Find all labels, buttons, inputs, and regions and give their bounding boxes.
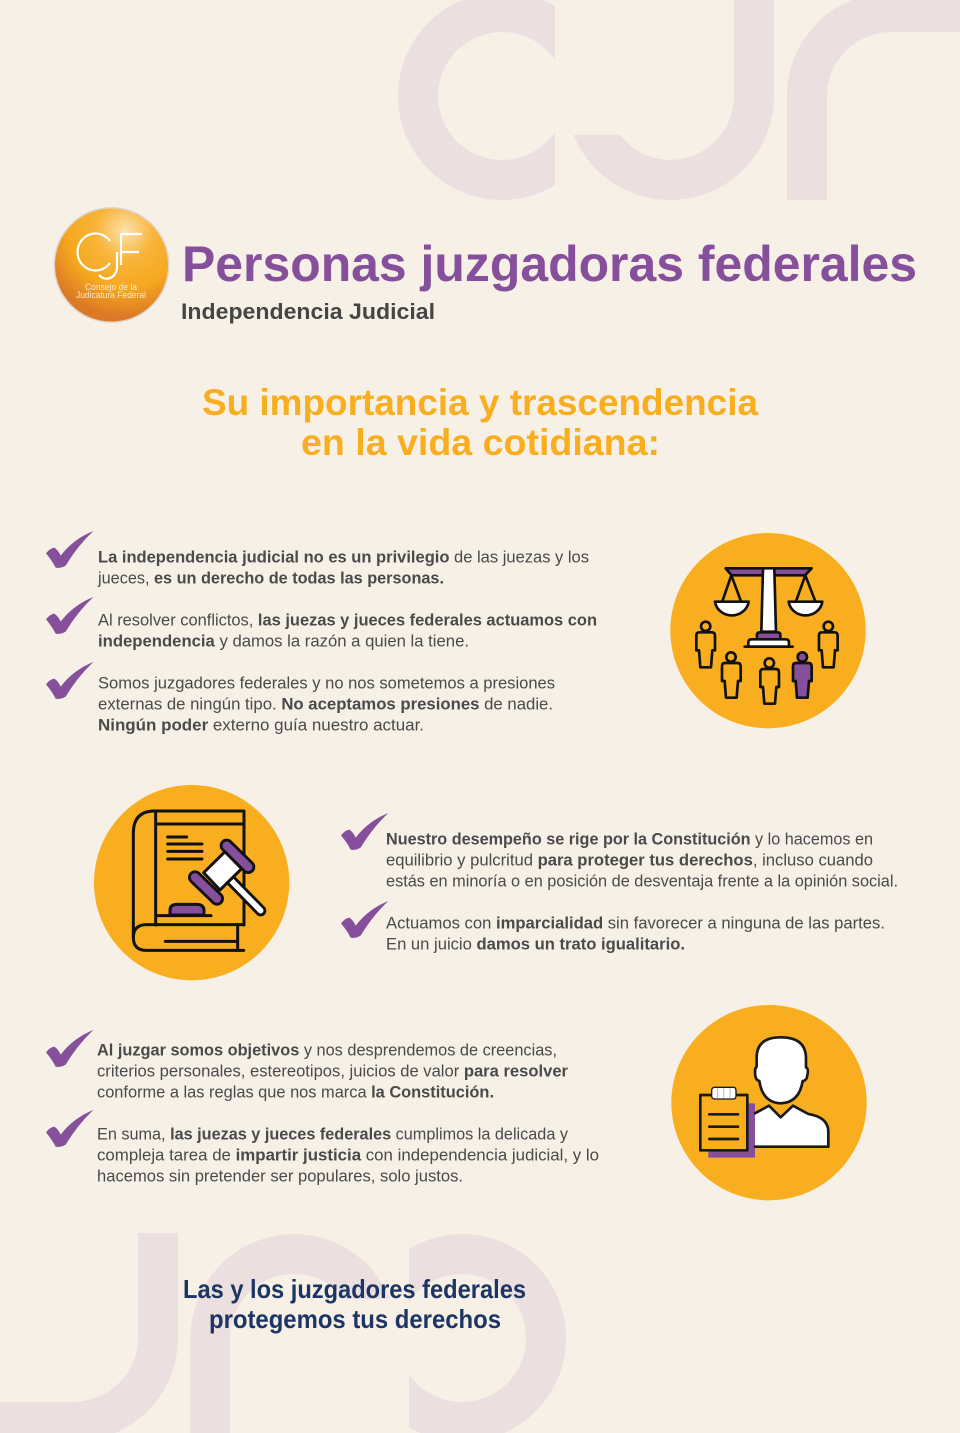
icon: scales and people — [670, 533, 866, 728]
text: Constitución: Nuestro desempeño se rige por la Constitución y lo hacemos en — [386, 830, 873, 848]
checkmark 2 — [46, 597, 93, 634]
checkmark 1 — [46, 531, 93, 568]
closing message — [183, 1274, 526, 1334]
logo: Consejo de la — [85, 282, 137, 292]
text: conflictos: Al resolver conflictos, las juezas y jueces federales actuamos con — [98, 610, 597, 630]
text: objetivos: criterios personales, estereotipos, juicios de valor para resolver — [97, 1062, 568, 1080]
text: privilegio: jueces, es un derecho de todas las personas. — [97, 568, 444, 588]
text: en suma: compleja tarea de impartir justicia con independencia judicial, y lo — [97, 1146, 599, 1164]
icon: person with clipboard — [671, 1005, 867, 1200]
section heading: en la vida cotidiana: — [301, 422, 660, 463]
text: presiones: Somos juzgadores federales y no nos sometemos a presiones — [98, 674, 555, 692]
text: presiones: externas de ningún tipo. No aceptamos presiones de nadie. — [98, 694, 553, 714]
logo: Judicatura Federal — [76, 290, 146, 300]
logo — [54, 207, 170, 323]
text: en suma — [97, 1124, 599, 1186]
text: conflictos: independencia y damos la razón a quien la tiene. — [98, 632, 469, 650]
text: objetivos: conforme a las reglas que nos marca la Constitución. — [97, 1082, 494, 1102]
text: privilegio: La independencia judicial no es un privilegio de las juezas y los — [98, 548, 589, 566]
closing message: protegemos tus derechos — [209, 1304, 501, 1334]
background letters bottom — [0, 1233, 566, 1433]
checkmark 7 — [46, 1110, 93, 1147]
text: objetivos: Al juzgar somos objetivos y nos desprendemos de creencias, — [97, 1040, 557, 1060]
checkmark 3 — [46, 662, 93, 699]
text: objetivos — [97, 1040, 568, 1102]
text: Constitución — [386, 830, 898, 890]
text: presiones — [98, 674, 555, 734]
text: en suma: En suma, las juezas y jueces federales cumplimos la delicada y — [97, 1124, 569, 1144]
text: en suma: hacemos sin pretender ser populares, solo justos. — [97, 1166, 463, 1186]
text: Constitución: estás en minoría o en posición de desventaja frente a la opinión social. — [386, 872, 898, 890]
section heading — [202, 382, 758, 463]
checkmark 4 — [341, 813, 388, 850]
text: imparcialidad: En un juicio damos un trato igualitario. — [386, 934, 685, 954]
closing message: Las y los juzgadores federales — [183, 1274, 526, 1304]
checkmark 5 — [341, 901, 388, 938]
text: presiones: Ningún poder externo guía nuestro actuar. — [98, 716, 424, 734]
checkmark 6 — [46, 1030, 93, 1067]
text: Constitución: equilibrio y pulcritud para proteger tus derechos, incluso cuando — [386, 850, 873, 870]
text: conflictos — [98, 610, 597, 650]
icon: book and gavel — [94, 785, 289, 980]
section heading: Su importancia y trascendencia — [202, 382, 758, 423]
subtitle: Independencia Judicial — [181, 299, 435, 324]
background letters top — [398, 0, 960, 200]
title: Personas juzgadoras federales — [182, 236, 917, 292]
text: imparcialidad — [386, 914, 885, 954]
text: imparcialidad: Actuamos con imparcialidad sin favorecer a ninguna de las partes. — [386, 914, 885, 932]
text: privilegio — [97, 548, 589, 588]
